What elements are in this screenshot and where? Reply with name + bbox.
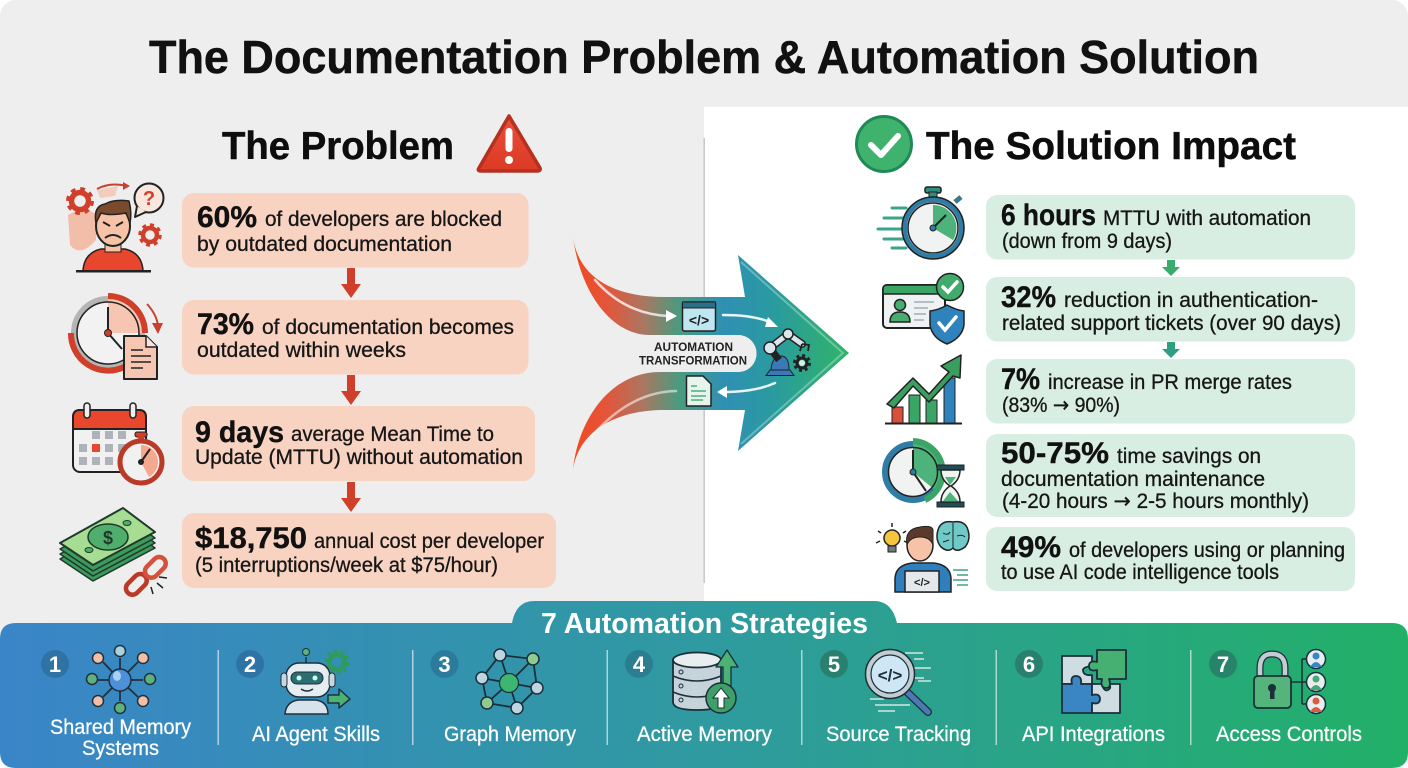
pill label: AUTOMATION: [654, 340, 733, 354]
strategy 7: 7: [1217, 652, 1229, 677]
icon: calendar and stopwatch: [73, 403, 162, 483]
stat card: 6 hours: (down from 9 days): [1002, 230, 1172, 253]
stat card: 73 percent: of documentation becomes: [262, 316, 514, 339]
stat card: 6 hours: MTTU with automation: [1103, 207, 1311, 230]
arrow: small down 1: [1162, 260, 1180, 276]
icon: robot with gear: [281, 648, 350, 714]
strategy 6: API Integrations: [1022, 723, 1165, 746]
icon: developer with idea and brain: </>: [914, 577, 930, 589]
panel: the problem: [60, 116, 556, 597]
icon: identity card with shield: [883, 274, 964, 344]
stat card: 18750 dollars: $18,750: [195, 522, 307, 555]
icon: shared memory hub: [86, 646, 156, 714]
title: The Documentation Problem & Automation Solution: [149, 31, 1259, 83]
icon: warning triangle: [478, 116, 540, 171]
stat card: 9 days: [182, 406, 535, 481]
icon: frustrated developer: [68, 182, 164, 272]
strategy 1: [41, 646, 191, 760]
strategy 6: [1015, 650, 1165, 746]
icon: code window: [682, 302, 716, 331]
stat card: 49 percent: of developers using or planning: [1069, 539, 1345, 562]
icon: frustrated developer: ?: [143, 188, 155, 210]
dividers: [218, 650, 1192, 745]
strategy 4: 4: [633, 652, 646, 677]
stat card: 49 percent: to use AI code intelligence tools: [1001, 561, 1279, 584]
flow arrows: [592, 280, 775, 436]
arrow: down 3: [341, 482, 361, 512]
icon: puzzle pieces: [1062, 650, 1126, 713]
stat card: 7 percent: [986, 359, 1355, 424]
icon: clock with hourglass: [885, 441, 964, 507]
stat card: 60 percent: 60%: [197, 201, 257, 234]
stat card: 6 hours: [986, 195, 1355, 260]
stat card: 9 days: Update (MTTU) without automation: [195, 446, 523, 469]
arrow: down 1: [341, 268, 361, 298]
stat card: 18750 dollars: [182, 513, 556, 588]
icon: developer with idea and brain: [876, 522, 969, 592]
strategy 6: 6: [1023, 652, 1035, 677]
stat card: 60 percent: [182, 193, 528, 268]
icon: document: [686, 376, 711, 406]
strategy 5: [820, 650, 971, 746]
transformation arrow: [573, 237, 849, 470]
icon: lock with users: [1254, 650, 1326, 714]
panel: 7 automation strategies: [0, 601, 1408, 768]
stat card: 50-75 percent: [986, 434, 1355, 517]
arrow: small down 2: [1162, 342, 1180, 358]
icon: green check circle: [856, 116, 912, 172]
strategy 7: [1209, 650, 1362, 746]
stat card: 9 days: average Mean Time to: [291, 423, 494, 446]
stat card: 7 percent: 7%: [1001, 363, 1040, 396]
icon: growth chart: [885, 355, 962, 424]
stat card: 32 percent: reduction in authentication-: [1064, 289, 1318, 312]
stat card: 18750 dollars: (5 interruptions/week at $75/hour): [195, 554, 498, 577]
stat card: 49 percent: 49%: [1001, 531, 1061, 564]
icon: money stack and broken chain: [60, 508, 168, 597]
panel: the solution impact: [856, 116, 1355, 592]
strategy 1: 1: [49, 652, 61, 677]
strategy 3: 3: [438, 652, 451, 677]
stat card: 18750 dollars: annual cost per developer: [314, 530, 544, 553]
strategy 4: [625, 650, 772, 746]
stat card: 32 percent: related support tickets (over 90 days): [1002, 312, 1341, 335]
stat card: 60 percent: by outdated documentation: [197, 233, 452, 256]
icon: code window: </>: [689, 312, 709, 328]
strategy 5: Source Tracking: [826, 723, 971, 746]
stat card: 73 percent: [182, 300, 528, 374]
stat card: 32 percent: 32%: [1001, 281, 1056, 314]
icon: database with upload: [673, 650, 738, 713]
stat card: 32 percent: [986, 277, 1355, 342]
stat card: 60 percent: of developers are blocked: [265, 208, 502, 231]
heading: the solution impact: The Solution Impact: [926, 125, 1296, 168]
pill label: [632, 335, 756, 372]
heading: the problem: The Problem: [222, 125, 454, 168]
strategy 2: AI Agent Skills: [252, 723, 380, 746]
stat card: 6 hours: 6 hours: [1001, 199, 1096, 232]
strategy 5: 5: [828, 652, 840, 677]
icon: money stack and broken chain: $: [103, 528, 113, 548]
stat card: 49 percent: [986, 527, 1355, 591]
heading: strategies: 7 Automation Strategies: [541, 608, 868, 640]
strategy 1: Systems: [82, 737, 159, 760]
stat card: 50-75 percent: 50-75%: [1001, 437, 1109, 470]
stat card: 50-75 percent: documentation maintenance: [1001, 468, 1265, 491]
strategy 4: Active Memory: [637, 723, 772, 746]
strategy 1: Shared Memory: [50, 716, 191, 739]
arrow body: [573, 237, 849, 470]
stat card: 50-75 percent: (4-20 hours → 2-5 hours monthly): [1002, 489, 1309, 513]
strategy 7: Access Controls: [1216, 723, 1362, 746]
arrow: down 2: [341, 375, 361, 405]
icon: code magnifier: [866, 650, 931, 712]
strategy 3: Graph Memory: [444, 723, 576, 746]
icon: graph network: [476, 649, 543, 714]
pill label: TRANSFORMATION: [639, 354, 747, 368]
stat card: 7 percent: increase in PR merge rates: [1048, 371, 1292, 394]
stat card: 9 days: 9 days: [195, 416, 284, 449]
band: [0, 601, 1408, 768]
stat card: 73 percent: 73%: [197, 308, 254, 341]
stat card: 73 percent: outdated within weeks: [197, 339, 406, 362]
icon: code magnifier: </>: [878, 666, 902, 685]
icon: fast stopwatch: [878, 187, 964, 259]
stat card: 50-75 percent: time savings on: [1117, 445, 1261, 468]
strategy 3: [430, 649, 576, 746]
strategy 2: 2: [244, 652, 256, 677]
icon: robot arm: [764, 329, 809, 376]
stat card: 7 percent: (83% → 90%): [1002, 393, 1120, 417]
icon: clock and outdated document: [71, 296, 163, 379]
strategy 2: [236, 648, 380, 746]
